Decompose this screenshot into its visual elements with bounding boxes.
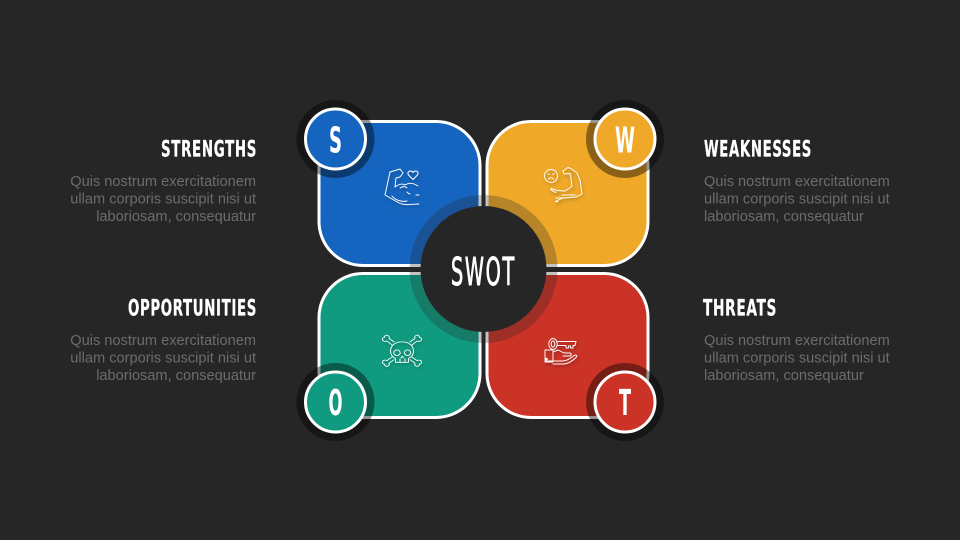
icon: S badge: S [329,120,342,162]
text block: strengths: STRENGTHS [161,136,257,162]
icon: flexed arm with heart [385,169,419,205]
text block: threats [703,296,890,384]
text block: weaknesses: laboriosam, consequatur [704,209,864,225]
text block: weaknesses: WEAKNESSES [704,136,812,162]
text block: opportunities: Quis nostrum exercitationem [70,333,256,349]
icon: centre circle [420,206,546,332]
icon: S badge [296,100,374,178]
text block: opportunities: OPPORTUNITIES [128,296,257,322]
text block: weaknesses: Quis nostrum exercitationem [704,174,890,190]
icon: centre halo ring [410,195,558,343]
icon: hand holding key [545,338,577,364]
text block: strengths: laboriosam, consequatur [96,209,256,225]
text block: strengths: Quis nostrum exercitationem [70,174,256,190]
icon: W badge: W [615,120,635,162]
panel: opportunities card [319,274,480,418]
text block: threats: ullam corporis suscipit nisi ut [704,350,890,366]
text block: opportunities: laboriosam, consequatur [96,368,256,384]
icon: W badge [586,100,664,178]
icon: sad face and arm [544,168,582,202]
text block: strengths [70,136,257,225]
icon: T badge [586,363,664,441]
icon: skull and crossbones [382,335,422,366]
panel: strengths card [319,122,480,266]
panel: weaknesses card [487,122,648,266]
icon: O badge [296,363,374,441]
text block: strengths: ullam corporis suscipit nisi ut [70,192,256,208]
text block: weaknesses: ullam corporis suscipit nisi ut [704,192,890,208]
icon: T badge: T [619,383,631,424]
heading: SWOT: SWOT [451,250,516,294]
text block: opportunities: ullam corporis suscipit nisi ut [70,350,256,366]
text block: threats: Quis nostrum exercitationem [704,333,890,349]
icon: O badge: O [328,383,342,424]
text block: threats: laboriosam, consequatur [704,368,864,384]
text block: threats: THREATS [703,296,777,322]
panel: threats card [487,274,648,418]
text block: weaknesses [704,136,890,225]
text block: opportunities [70,296,257,384]
